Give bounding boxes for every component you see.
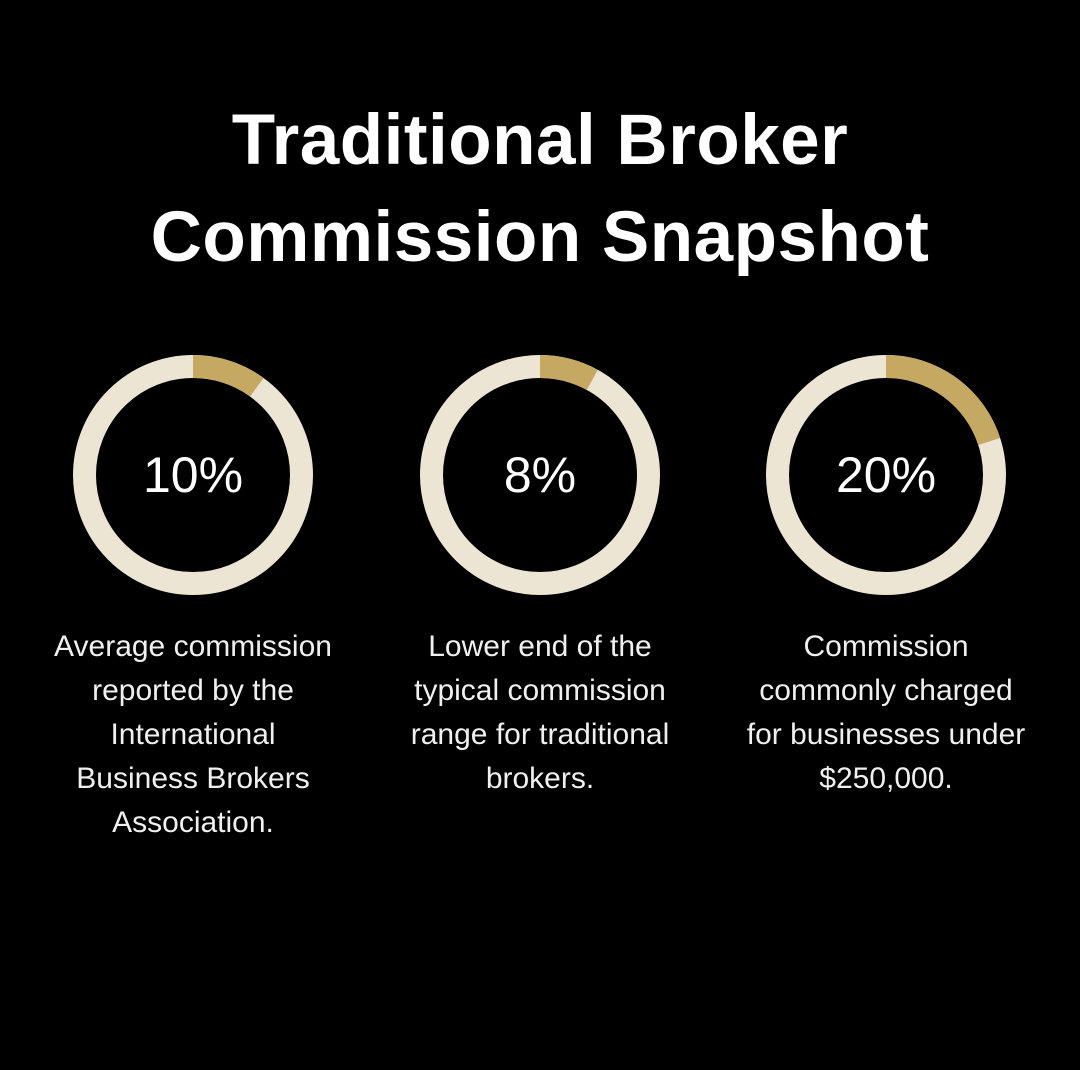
donut: 8%	[432, 366, 648, 584]
description: 10%: reported by the	[92, 674, 294, 707]
description: 8%: Lower end of the	[428, 630, 652, 663]
description: 8%	[411, 630, 669, 795]
description: 10%: Average commission	[54, 630, 332, 663]
description: 20%: for businesses under	[747, 718, 1025, 751]
donut: 10%: 10%	[143, 447, 243, 503]
description: 20%: $250,000.	[819, 762, 953, 795]
donut: 8%: 8%	[504, 447, 576, 503]
description: 10%: Business Brokers	[76, 762, 310, 795]
title: Commission Snapshot	[151, 198, 929, 277]
description: 20%	[747, 630, 1025, 795]
description: 20%: commonly charged	[759, 674, 1013, 707]
donut: 20%	[778, 366, 994, 584]
description: 8%: typical commission	[414, 674, 666, 707]
title: Traditional Broker	[232, 101, 848, 180]
description: 10%: Association.	[112, 806, 274, 839]
description: 8%: range for traditional	[411, 718, 669, 751]
donut: 10%	[84, 366, 302, 584]
title	[151, 101, 929, 277]
description: 20%: Commission	[803, 630, 969, 663]
description: 10%	[54, 630, 332, 839]
donut: 20%: 20%	[836, 447, 936, 503]
description: 10%: International	[110, 718, 276, 751]
description: 8%: brokers.	[486, 762, 594, 795]
